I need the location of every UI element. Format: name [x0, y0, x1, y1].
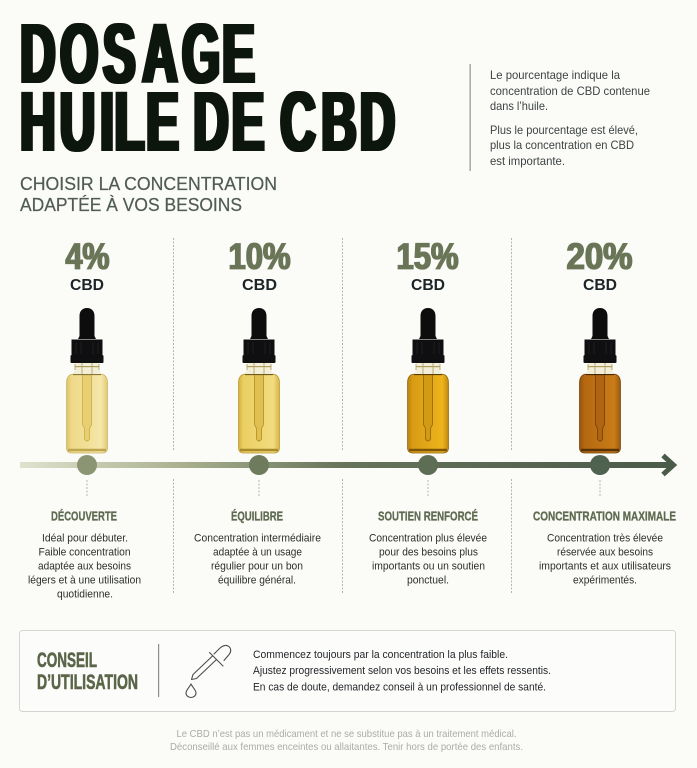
bottle: 20% [580, 308, 620, 453]
column: découverte: Idéal pour débuter. [42, 532, 128, 544]
advice text: Ajustez progressivement selon vos besoins et les effets ressentis. [253, 665, 551, 677]
percentage: 20% CBD [566, 236, 632, 294]
percentage: 15% CBD: CBD [411, 277, 445, 294]
column: soutien renforcé: pour des besoins plus [379, 546, 478, 558]
percentage: 10% CBD [228, 236, 290, 294]
footer disclaimer: Déconseillé aux femmes enceintes ou allaitantes. Tenir hors de portée des enfants. [170, 742, 523, 753]
percentage: 15% CBD: 15% [396, 236, 458, 277]
subtitle: ADAPTÉE À VOS BESOINS [20, 195, 242, 215]
subtitle: CHOISIR LA CONCENTRATION [20, 174, 277, 194]
title: HUILE DE CBD [20, 75, 395, 169]
footer disclaimer: Le CBD n’est pas un médicament et ne se substitue pas à un traitement médical. [176, 729, 516, 740]
column: concentration maximale [533, 508, 676, 586]
intro text block: Le pourcentage indique la [490, 68, 620, 82]
column: équilibre [194, 508, 321, 586]
footer disclaimer [170, 729, 523, 753]
intro text block: dans l’huile. [490, 99, 548, 113]
subtitle [20, 174, 277, 215]
column: équilibre: ÉQUILIBRE [231, 508, 283, 524]
advice text: Commencez toujours par la concentration la plus faible. [253, 649, 508, 661]
percentage: 4% CBD [66, 236, 110, 294]
advice text [253, 649, 551, 694]
percentage: 4% CBD: CBD [70, 277, 104, 294]
column: découverte: DÉCOUVERTE [51, 508, 117, 524]
column: équilibre: équilibre général. [218, 574, 296, 586]
heading: conseil: D’UTILISATION [37, 670, 138, 694]
intro text block: concentration de CBD contenue [490, 84, 650, 98]
column: soutien renforcé: importants ou un soutien [372, 560, 485, 572]
heading: conseil [37, 648, 138, 694]
column: découverte: quotidienne. [57, 588, 113, 600]
percentage: 20% CBD: CBD [583, 277, 617, 294]
column: équilibre: Concentration intermédiaire [194, 532, 321, 544]
advice text: En cas de doute, demandez conseil à un professionnel de santé. [253, 682, 546, 694]
column: concentration maximale: réservée aux besoins [557, 546, 653, 558]
column: soutien renforcé: ponctuel. [407, 574, 449, 586]
timeline arrow [20, 455, 674, 475]
panel: conseil d'utilisation [20, 630, 676, 712]
column: soutien renforcé [369, 508, 487, 586]
column: découverte [28, 508, 141, 600]
percentage: 10% CBD: 10% [228, 236, 290, 277]
column: découverte: Faible concentration [38, 546, 130, 558]
intro text block: est importante. [490, 154, 565, 168]
bottle: 4% [66, 308, 108, 453]
column: équilibre: régulier pour un bon [211, 560, 303, 572]
bottle: 10% [238, 308, 280, 453]
column: découverte: adaptée aux besoins [38, 560, 131, 572]
bottle: 15% [408, 308, 448, 453]
icon: dropper [186, 645, 231, 698]
column: concentration maximale: expérimentés. [573, 574, 637, 586]
intro text block [470, 64, 650, 171]
heading: conseil: CONSEIL [37, 648, 97, 672]
intro text block: plus la concentration en CBD [490, 138, 634, 152]
percentage: 20% CBD: 20% [566, 236, 632, 277]
column: concentration maximale: importants et aux utilisateurs [539, 560, 671, 572]
column: concentration maximale: Concentration très élevée [547, 532, 663, 544]
percentage: 10% CBD: CBD [242, 277, 277, 294]
column: soutien renforcé: Concentration plus élevée [369, 532, 487, 544]
percentage: 15% CBD [396, 236, 458, 294]
title [20, 7, 395, 169]
intro text block: Plus le pourcentage est élevé, [490, 123, 638, 137]
column: équilibre: adaptée à un usage [213, 546, 302, 558]
column: soutien renforcé: SOUTIEN RENFORCÉ [378, 508, 478, 524]
title: DOSAGE [20, 7, 255, 101]
column: découverte: légers et à une utilisation [28, 574, 141, 586]
percentage: 4% CBD: 4% [66, 236, 110, 277]
